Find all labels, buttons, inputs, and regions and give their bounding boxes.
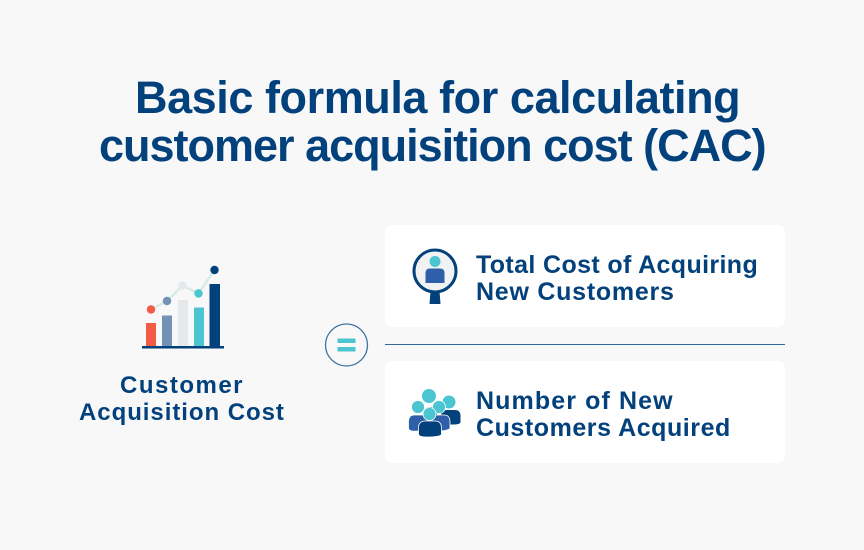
label: customer acquisition cost: Customer xyxy=(120,372,244,399)
icon: group of people xyxy=(408,389,460,437)
label: customer acquisition cost: Acquisition Cost xyxy=(79,399,285,426)
fraction line xyxy=(385,344,785,345)
equals sign xyxy=(324,323,368,367)
panel: numerator xyxy=(385,225,785,327)
denominator text xyxy=(476,387,731,442)
numerator text: New Customers xyxy=(476,278,675,306)
numerator text: Total Cost of Acquiring xyxy=(476,251,758,279)
title: Basic formula for calculating xyxy=(135,72,740,123)
denominator text: Customers Acquired xyxy=(476,414,731,442)
title xyxy=(99,72,766,171)
numerator text xyxy=(476,251,758,306)
icon: person in magnifier xyxy=(412,248,458,304)
denominator text: Number of New xyxy=(476,387,674,415)
icon: bar chart with trend line xyxy=(142,266,224,348)
panel: denominator xyxy=(385,361,785,463)
label: customer acquisition cost xyxy=(79,372,285,426)
title: customer acquisition cost (CAC) xyxy=(99,120,766,171)
